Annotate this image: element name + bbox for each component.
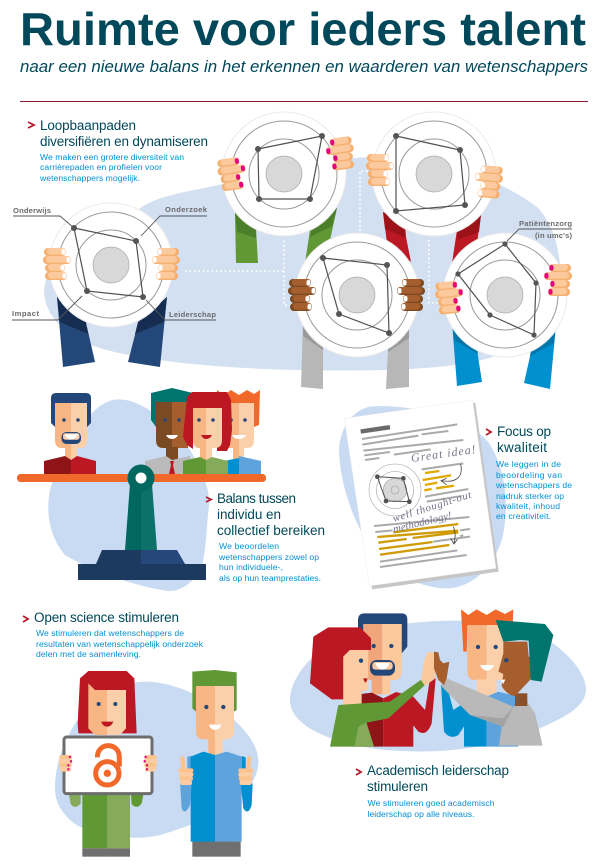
tablet hands <box>59 755 157 772</box>
text block: Focus op kwaliteit: wetenschappers de <box>495 480 572 490</box>
text block: Balans: hun individuele-, <box>219 562 283 572</box>
text block: Academisch leiderschap: Academisch leiderschap <box>367 763 509 778</box>
person: man with thumbs up <box>178 670 253 857</box>
text block: Balans: als op hun teamprestaties. <box>219 573 321 583</box>
scale beam <box>17 474 266 482</box>
blue arms <box>452 322 556 389</box>
plate: red profile <box>372 112 496 236</box>
text block: Loopbaanpaden: diversifiëren en dynamiseren <box>40 134 208 149</box>
plate: green profile <box>222 112 346 236</box>
text block: Balans: We beoordelen <box>219 541 279 551</box>
text block: Loopbaanpaden <box>28 118 208 183</box>
red arms <box>383 212 481 263</box>
label: Impact <box>12 296 82 320</box>
hands <box>43 136 572 315</box>
annotation: well thought-out methodology: methodology! <box>392 510 453 536</box>
text block: Academisch leiderschap: We stimuleren goed academisch <box>368 798 495 808</box>
gray arms <box>301 320 409 389</box>
text block: Loopbaanpaden: wetenschappers mogelijk. <box>39 173 140 183</box>
text block: Academisch leiderschap <box>356 763 509 819</box>
text block: Focus op kwaliteit: nadruk sterker op <box>496 491 564 501</box>
tablet with open access icon <box>64 737 152 794</box>
person: teal hair man <box>145 388 193 474</box>
panel: balance illustration <box>17 388 266 591</box>
label: Patiëntenzorg: Patiëntenzorg <box>519 219 572 228</box>
person: navy hair man <box>353 613 436 747</box>
plate: gray profile <box>295 233 419 357</box>
blob <box>55 682 258 838</box>
text block: Open science <box>23 610 204 659</box>
label: Leiderschap <box>146 300 216 320</box>
text block: Focus op kwaliteit: We leggen in de <box>496 459 561 469</box>
annotation: Great idea <box>410 442 476 485</box>
person: red hair woman <box>310 627 435 747</box>
text block: Focus op kwaliteit: en creativiteit. <box>496 511 551 521</box>
text block: Open science: We stimuleren dat wetenschappers de <box>36 628 184 638</box>
subtitle: naar een nieuwe balans in het erkennen en waarderen van wetenschappers <box>20 58 588 76</box>
text block: Focus op kwaliteit: kwaliteit, inhoud <box>496 501 560 511</box>
text block: Balans <box>206 491 325 583</box>
dotted connectors <box>185 171 442 305</box>
person: orange hair man <box>217 390 261 474</box>
green arms <box>235 208 337 263</box>
mini chart <box>369 464 421 516</box>
annotation: Great idea: Great idea! <box>410 442 476 465</box>
panel: career paths illustration <box>43 112 572 389</box>
text block: Open science: resultaten van wetenschappelijk onderzoek <box>36 639 204 649</box>
text block: Loopbaanpaden: We maken een grotere diversiteit van <box>40 152 184 162</box>
background blob <box>44 157 560 370</box>
person: woman <box>69 671 143 857</box>
text block: Academisch leiderschap: leiderschap op alle niveaus. <box>368 809 474 819</box>
text block: Focus op kwaliteit <box>486 424 572 521</box>
text block: Focus op kwaliteit: kwaliteit <box>497 440 547 455</box>
label: Impact: Impact <box>12 309 39 318</box>
label: Patiëntenzorg: (in umc's) <box>535 231 572 240</box>
highlights <box>377 471 458 555</box>
text block: Focus op kwaliteit: beoordeling van <box>496 470 562 480</box>
person: navy hair man <box>44 393 96 474</box>
panel: document illustration <box>339 400 506 589</box>
text block: Balans: Balans tussen <box>217 491 296 506</box>
plate: blue profile with patient care <box>443 233 567 357</box>
scale stand <box>78 464 206 580</box>
text block: Open science: Open science stimuleren <box>34 610 179 625</box>
blob <box>48 399 209 591</box>
text block: Academisch leiderschap: stimuleren <box>367 779 428 794</box>
text lines <box>362 424 470 567</box>
text block: Focus op kwaliteit: Focus op <box>497 424 551 439</box>
text block: Open science: delen met de samenleving. <box>36 649 141 659</box>
title: Ruimte voor ieders talent <box>20 3 586 55</box>
text block: Balans: collectief bereiken <box>217 523 325 538</box>
label: Onderzoek: Onderzoek <box>165 205 208 214</box>
label: Leiderschap: Leiderschap <box>169 310 216 319</box>
blob <box>290 621 586 751</box>
text block: Balans: individu en <box>217 507 281 522</box>
text block: Loopbaanpaden: carrièrepaden en profielen voor <box>40 162 162 172</box>
plate: navy profile <box>49 203 173 327</box>
label: Patiëntenzorg <box>507 219 572 241</box>
annotation: well thought-out methodology: well thought-out <box>392 490 474 525</box>
label: Onderzoek <box>141 205 208 236</box>
annotation: well thought-out methodology <box>392 490 474 544</box>
text block: Balans: wetenschappers zowel op <box>218 552 319 562</box>
navy arms <box>57 297 167 367</box>
person: teal hair man <box>434 620 553 746</box>
panel: high five illustration <box>290 609 586 751</box>
panel: open science illustration <box>55 670 258 857</box>
paper <box>344 400 499 589</box>
text block: Loopbaanpaden: Loopbaanpaden <box>40 118 136 133</box>
label: Onderwijs <box>13 206 74 228</box>
blob <box>339 406 506 588</box>
person: orange hair man <box>441 609 518 747</box>
person: red hair woman <box>183 392 232 474</box>
label: Onderwijs: Onderwijs <box>13 206 51 215</box>
